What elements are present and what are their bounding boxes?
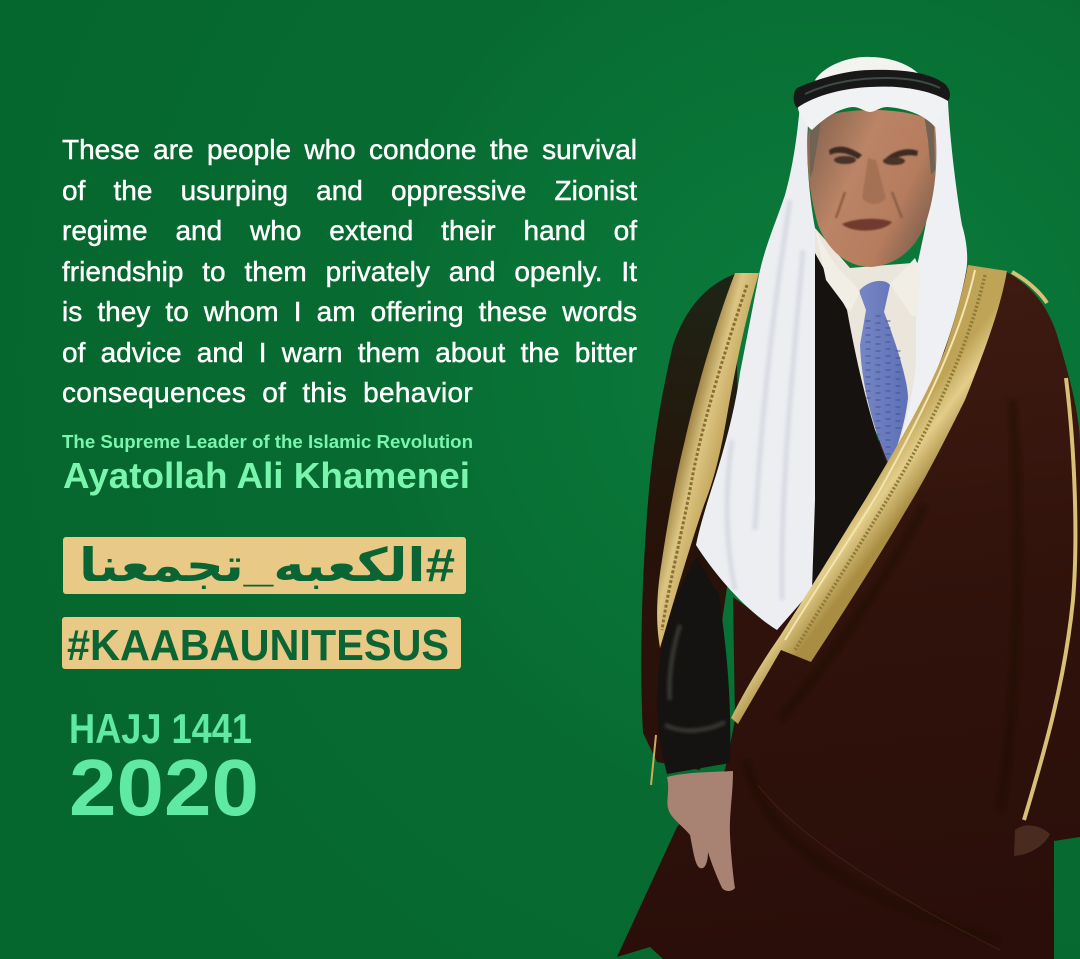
left hand <box>667 771 735 891</box>
black jacket <box>808 253 888 590</box>
right hand <box>1014 825 1050 856</box>
attribution title: The Supreme Leader of the Islamic Revolution <box>62 432 473 452</box>
gold cord right edge <box>1012 272 1075 820</box>
neck and face <box>808 110 936 267</box>
black headband (agal) <box>794 70 950 108</box>
black sleeve <box>657 557 730 774</box>
collar points <box>815 228 920 316</box>
brows <box>829 147 862 159</box>
eyes <box>834 156 856 164</box>
hajj year: HAJJ 1441 <box>69 705 252 752</box>
attribution name: Ayatollah Ali Khamenei <box>63 455 470 496</box>
quote text block <box>62 134 638 408</box>
white scarf shadow folds <box>727 200 803 600</box>
gold trim centre sash <box>731 265 1007 724</box>
quote text block: is they to whom I am offering these words <box>62 296 637 327</box>
left robe shoulder and sleeve <box>641 274 740 770</box>
figure in traditional dress <box>617 57 1080 959</box>
attribution <box>62 432 473 496</box>
hashtag banner: Arabic: #الكعبه_تجمعنا <box>79 539 455 591</box>
facial features <box>829 147 918 231</box>
nose <box>862 158 886 204</box>
gold left stripes <box>662 285 747 630</box>
quote text block: These are people who condone the survival <box>62 134 637 165</box>
headband highlight <box>805 78 940 94</box>
quote text block: regime and who extend their hand of <box>62 215 637 246</box>
gold trim left <box>657 273 759 648</box>
sleeve highlight <box>665 625 725 731</box>
mouth <box>842 219 892 231</box>
blue patterned tie <box>859 281 908 467</box>
robe hem stitching <box>758 785 1000 950</box>
gold sash inner line <box>785 270 975 640</box>
hashtag banner: English: #KAABAUNITESUS <box>67 621 449 670</box>
quote text block: friendship to them privately and openly. It <box>62 256 637 286</box>
quote text block: of advice and I warn them about the bitter <box>62 336 637 368</box>
white headscarf right panel <box>898 102 967 452</box>
event label <box>69 705 259 832</box>
tie pattern <box>868 315 898 455</box>
quote text block: of the usurping and oppressive Zionist <box>62 174 637 206</box>
white headscarf left panel <box>696 104 825 630</box>
headscarf top <box>815 57 921 90</box>
gold sash stripes <box>795 275 985 650</box>
grey hair at temples <box>810 115 935 178</box>
gregorian year: 2020 <box>69 743 259 832</box>
cheek lines <box>836 192 902 218</box>
quote text block: consequences of this behavior <box>62 377 473 408</box>
main brown robe <box>617 270 1080 959</box>
scarf brow fold <box>798 80 948 130</box>
hanging cord <box>651 735 656 785</box>
white shirt <box>815 228 925 470</box>
robe fold shadows <box>745 400 1018 940</box>
